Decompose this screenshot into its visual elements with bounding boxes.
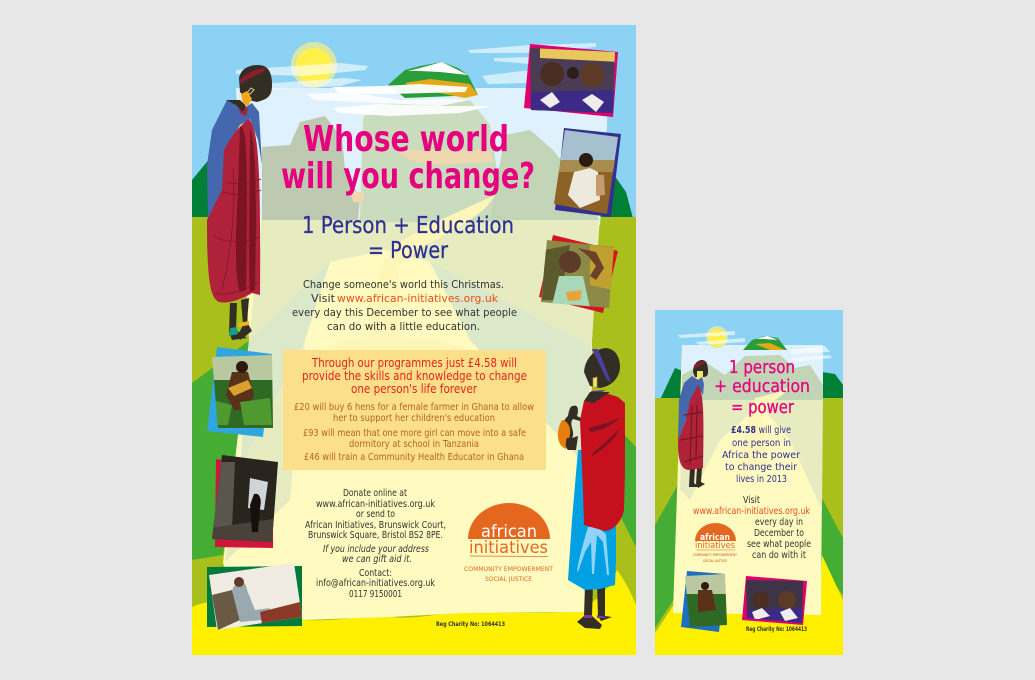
subtitle: 1 person plus education equals power (302, 213, 514, 264)
poster: small bookmark flyer (655, 310, 843, 655)
clouds around sun and horizon (236, 43, 596, 90)
flyer logo: african (700, 533, 730, 543)
flyer registered charity number: Reg Charity No: 1064413 (746, 626, 807, 633)
flyer website text: see what people (747, 539, 811, 550)
flyer mountain (743, 336, 787, 350)
flyer logo: initiatives (695, 541, 735, 551)
flyer message: to change their (725, 462, 798, 473)
flyer clouds (678, 331, 832, 362)
intro text with website (292, 278, 517, 333)
intro text with website: Change someone's world this Christmas. (303, 278, 504, 291)
logo: african initiatives: initiatives (469, 538, 548, 558)
legs and feet (577, 585, 612, 629)
flyer photo: female farmer (681, 571, 729, 632)
callout: what donations can buy: provide the skills and knowledge to change (302, 369, 527, 383)
callout: what donations can buy (283, 350, 546, 470)
photo 3: toddler (538, 235, 618, 313)
registered charity number: Reg Charity No: 1064413 (436, 621, 505, 628)
main title: Whose world (303, 119, 509, 160)
figure: woman carrying baby (558, 348, 625, 629)
flyer title: 1 person (729, 357, 795, 378)
flyer website text: every day in (755, 517, 803, 528)
logo: african initiatives: african (481, 522, 537, 542)
donation and contact details: If you include your address (323, 544, 429, 555)
callout: what donations can buy: one person's life forever (351, 382, 477, 396)
flyer logo: SOCIAL JUSTICE (703, 559, 727, 563)
intro text with website: Visit (311, 292, 336, 305)
snow-capped mountain (306, 62, 492, 116)
flyer message: one person in (732, 438, 791, 449)
subtitle: 1 person plus education equals power: 1 Person + Education (302, 213, 514, 239)
flyer photo: schoolchildren (742, 576, 807, 625)
flyer light panel (673, 345, 823, 615)
main title (281, 119, 535, 197)
figure: Maasai man in red robe (207, 65, 272, 340)
baby (558, 420, 570, 449)
callout: what donations can buy: £93 will mean that one more girl can move into a safe (303, 428, 526, 439)
head (239, 65, 272, 102)
flyer message: £4.58 will give (731, 425, 791, 436)
flyer message: Africa the power (722, 450, 801, 461)
donation and contact details: info@african-initiatives.org.uk (316, 578, 435, 589)
photo 5: child in doorway (212, 455, 278, 548)
photo 6: seated man (205, 562, 305, 632)
red robe (207, 119, 260, 303)
flyer figure: Maasai man (678, 360, 708, 488)
flyer website text (693, 495, 811, 561)
logo: african initiatives (464, 503, 553, 583)
donation and contact details: Brunswick Square, Bristol BS2 8PE. (308, 530, 443, 541)
light panel with distant mountains and road (223, 88, 608, 620)
photo 1: schoolchildren (524, 44, 620, 117)
photo 2: woman with child (550, 128, 622, 218)
poster background scene (192, 25, 636, 655)
blue cape (207, 100, 262, 220)
blue skirt (568, 450, 616, 590)
red dress (580, 393, 625, 531)
flyer website text: can do with it (752, 550, 806, 561)
flyer logo (693, 523, 738, 563)
flyer sun (706, 326, 728, 348)
donation and contact details: we can gift aid it. (342, 554, 412, 565)
donation and contact details: African Initiatives, Brunswick Court, (305, 520, 446, 531)
donation and contact details: www.african-initiatives.org.uk (316, 499, 435, 510)
callout: what donations can buy: £46 will train a Community Health Educator in Ghana (304, 452, 524, 463)
donation and contact details: 0117 9150001 (349, 589, 402, 600)
flyer logo: COMMUNITY EMPOWERMENT (693, 553, 738, 557)
callout: what donations can buy: her to support her children's education (333, 413, 495, 424)
intro text with website: www.african-initiatives.org.uk (337, 292, 499, 305)
subtitle: 1 person plus education equals power: = Power (368, 238, 448, 264)
infographic canvas (192, 25, 843, 655)
legs and feet (229, 298, 252, 340)
head (584, 348, 620, 388)
poster: large Christmas appeal (192, 25, 636, 655)
intro text with website: every day this December to see what people (292, 306, 517, 319)
logo: african initiatives: SOCIAL JUSTICE (485, 575, 532, 583)
callout: what donations can buy: £20 will buy 6 hens for a female farmer in Ghana to allow (294, 402, 534, 413)
flyer website text: December to (754, 528, 804, 539)
flyer website text: www.african-initiatives.org.uk (693, 506, 810, 517)
donation and contact details: or send to (356, 509, 395, 520)
flyer title (714, 357, 810, 418)
donation and contact details: Contact: (359, 568, 392, 579)
donation and contact details (305, 488, 446, 600)
logo: african initiatives: COMMUNITY EMPOWERMENT (464, 565, 553, 573)
flyer title: + education (714, 376, 810, 397)
flyer background scene (655, 310, 843, 655)
callout: what donations can buy: Through our programmes just £4.58 will (311, 356, 517, 370)
flyer message (722, 425, 801, 485)
intro text with website: can do with a little education. (327, 320, 480, 333)
sun (291, 42, 337, 88)
flyer website text: Visit (743, 495, 760, 506)
photo 4: female farmer (207, 347, 273, 437)
flyer message: lives in 2013 (736, 474, 787, 485)
flyer title: = power (731, 397, 794, 418)
donation and contact details: Donate online at (343, 488, 407, 499)
main title: will you change? (281, 156, 535, 197)
callout: what donations can buy: dormitory at school in Tanzania (349, 439, 479, 450)
